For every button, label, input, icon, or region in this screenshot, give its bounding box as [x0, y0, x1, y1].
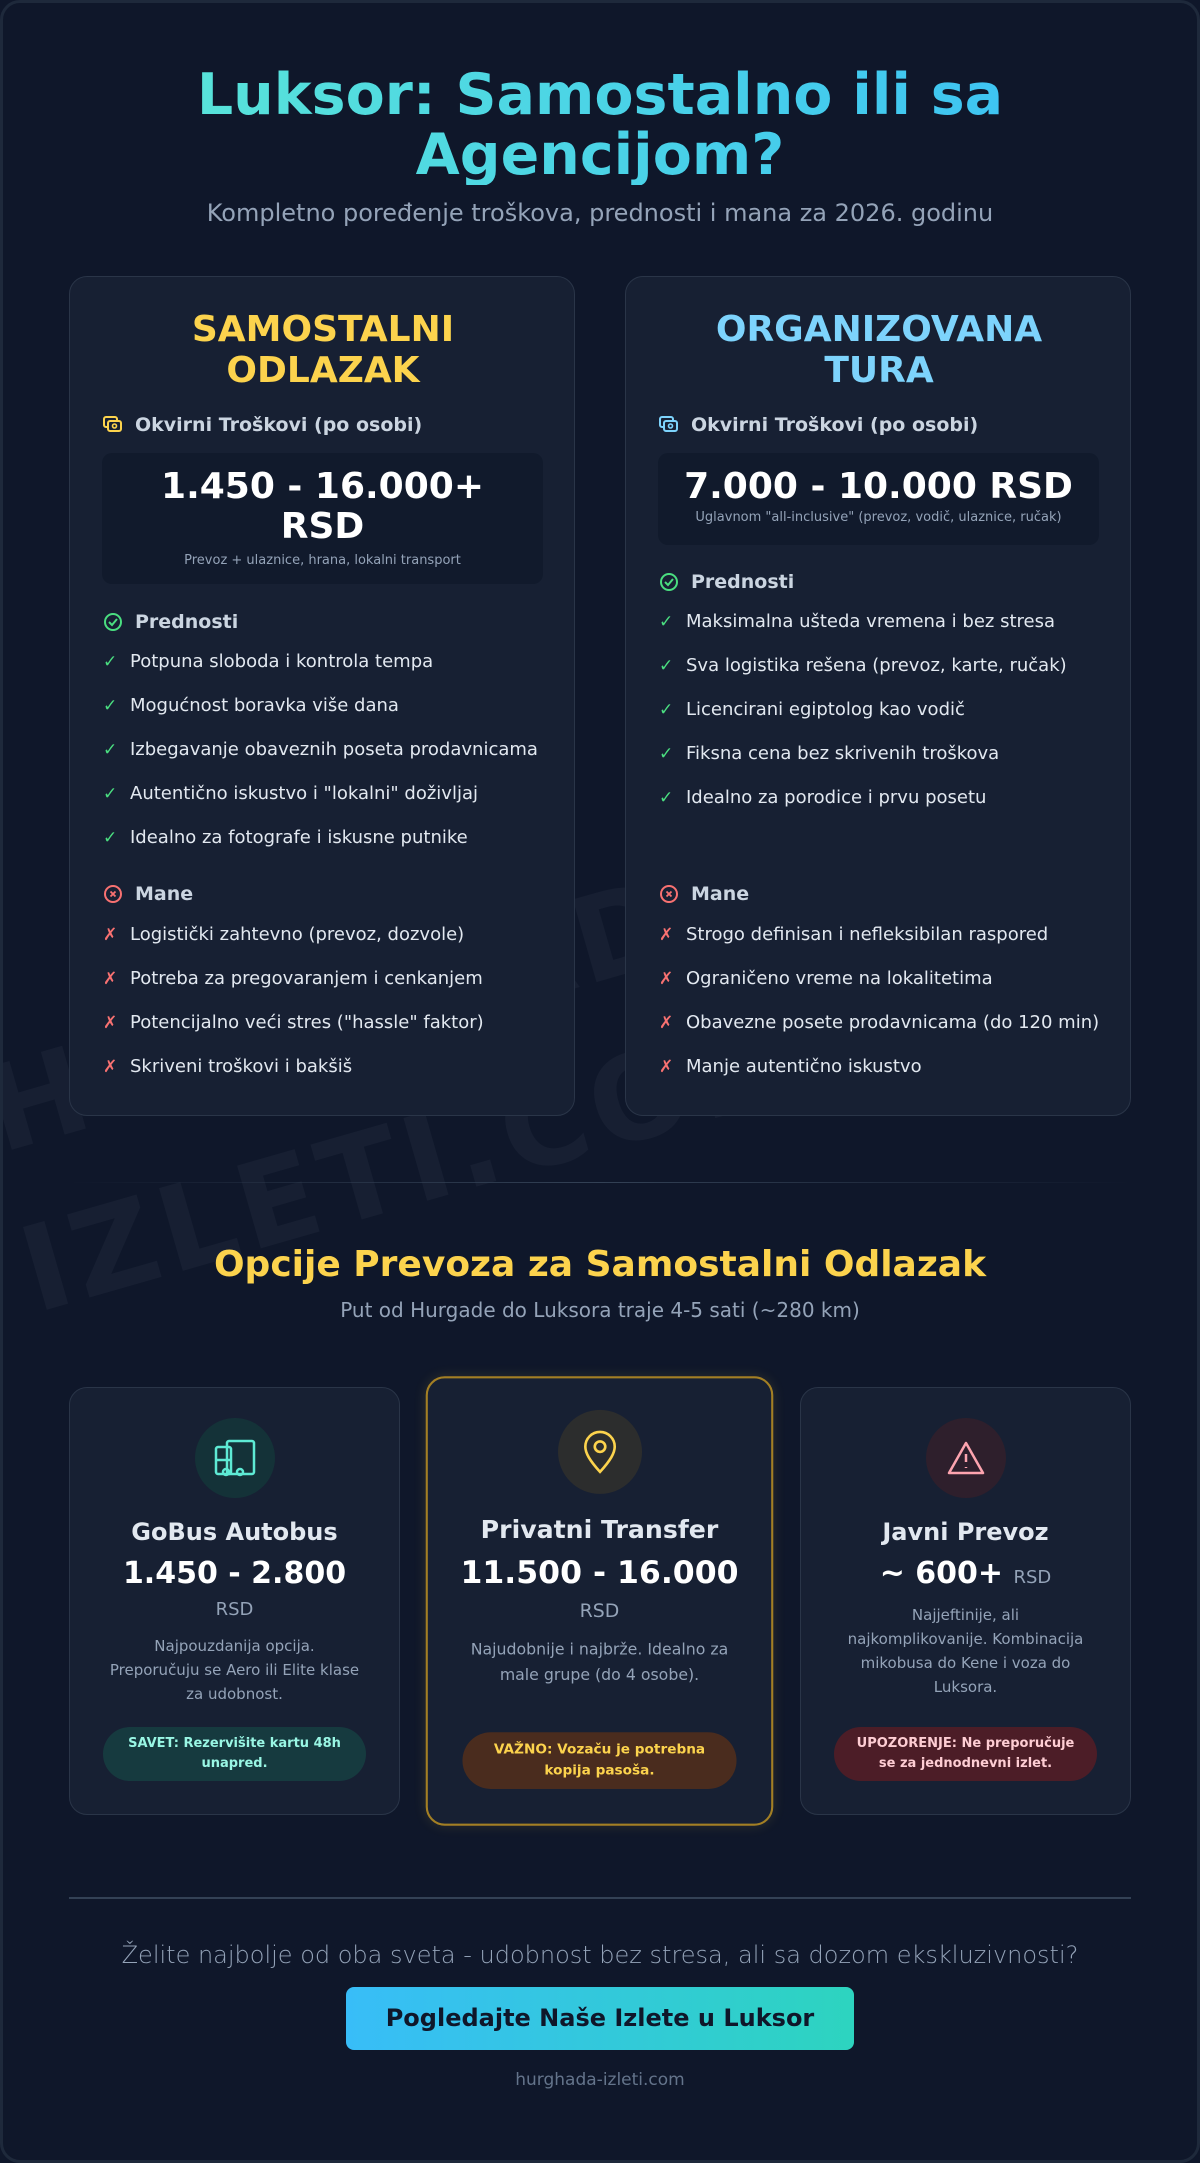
- price: 1.450 - 2.800: [123, 1556, 346, 1591]
- pros list: Izbegavanje obaveznih poseta prodavnicama: [130, 739, 538, 760]
- website url: hurghada-izleti.com: [515, 2070, 685, 2090]
- card heading: SAMOSTALNI: [192, 309, 454, 350]
- warning pill: se za jednodnevni izlet.: [879, 1756, 1052, 1771]
- cons heading: Mane: [691, 883, 749, 905]
- icon: bus: [194, 1418, 274, 1498]
- panel: organizovana tura: [625, 276, 1131, 1116]
- pros list: Maksimalna ušteda vremena i bez stresa: [686, 611, 1055, 632]
- cons list: Potencijalno veći stres ("hassle" faktor): [130, 1012, 484, 1033]
- cons list: ✗: [659, 1013, 673, 1033]
- section title: Opcije Prevoza za Samostalni Odlazak: [214, 1244, 986, 1285]
- description: mikobusa do Kene i voza do: [861, 1654, 1070, 1672]
- cons list: ✗: [659, 925, 673, 945]
- cons list: [103, 924, 484, 1077]
- subtitle: Kompletno poređenje troškova, prednosti i mana za 2026. godinu: [207, 199, 993, 227]
- panel: gobus: RSD: [216, 1599, 253, 1620]
- cons list: Skriveni troškovi i bakšiš: [130, 1056, 352, 1077]
- description: Luksora.: [934, 1678, 997, 1696]
- cons list: ✗: [103, 969, 117, 989]
- card heading: [716, 309, 1042, 391]
- title: GoBus Autobus: [131, 1518, 338, 1546]
- pros list: ✓: [659, 700, 673, 720]
- cons list: Ograničeno vreme na lokalitetima: [686, 968, 993, 989]
- description: [848, 1606, 1083, 1696]
- pros list: Fiksna cena bez skrivenih troškova: [686, 743, 999, 764]
- panel: privatni transfer: [426, 1376, 773, 1826]
- description: Najpouzdanija opcija.: [154, 1637, 315, 1655]
- pros list: Idealno za porodice i prvu posetu: [686, 787, 986, 808]
- tip pill: [103, 1727, 366, 1781]
- pros list: Autentično iskustvo i "lokalni" doživljaj: [130, 783, 478, 804]
- cons list: ✗: [103, 1013, 117, 1033]
- panel: samostalni odlazak: [69, 276, 575, 1116]
- pros list: ✓: [103, 784, 117, 804]
- cons list: ✗: [659, 969, 673, 989]
- price box: RSD: [281, 506, 364, 547]
- tip pill: unapred.: [201, 1756, 268, 1771]
- price box: 7.000 - 10.000 RSD: [684, 466, 1073, 507]
- pros list: ✓: [103, 696, 117, 716]
- costs heading: Okvirni Troškovi (po osobi): [135, 414, 422, 436]
- description: najkomplikovanije. Kombinacija: [848, 1630, 1083, 1648]
- description: za udobnost.: [186, 1685, 283, 1703]
- pros list: Mogućnost boravka više dana: [130, 695, 399, 716]
- warning pill: kopija pasoša.: [544, 1763, 655, 1778]
- icon: warning: [926, 1418, 1006, 1498]
- pros list: Idealno za fotografe i iskusne putnike: [130, 827, 468, 848]
- title: Agencijom?: [416, 122, 784, 188]
- cons list: Manje autentično iskustvo: [686, 1056, 922, 1077]
- pros list: [659, 611, 1067, 808]
- panel: privatni transfer: RSD: [580, 1600, 619, 1622]
- pros list: Potpuna sloboda i kontrola tempa: [130, 651, 433, 672]
- cons heading: Mane: [135, 883, 193, 905]
- cons list: [659, 924, 1099, 1077]
- description: [471, 1640, 728, 1684]
- cons list: ✗: [103, 1057, 117, 1077]
- footer question: Želite najbolje od oba sveta - udobnost bez stresa, ali sa dozom ekskluzivnosti?: [122, 1941, 1078, 1969]
- CTA button: Pogledajte Naše Izlete u Luksor: [386, 2004, 814, 2032]
- cons list: Potreba za pregovaranjem i cenkanjem: [130, 968, 483, 989]
- pros list: ✓: [659, 612, 673, 632]
- cons list: ✗: [659, 1057, 673, 1077]
- card heading: ODLAZAK: [226, 350, 420, 391]
- pros heading: Prednosti: [691, 571, 794, 593]
- warning pill: UPOZORENJE: Ne preporučuje: [857, 1736, 1074, 1751]
- title: Luksor: Samostalno ili sa: [197, 62, 1003, 128]
- cons list: Logistički zahtevno (prevoz, dozvole): [130, 924, 464, 945]
- cons list: Strogo definisan i nefleksibilan raspored: [686, 924, 1048, 945]
- CTA button: [346, 1987, 854, 2050]
- icon: location pin: [558, 1410, 642, 1494]
- panel: gobus: [69, 1387, 400, 1815]
- card heading: ORGANIZOVANA: [716, 309, 1042, 350]
- title: Javni Prevoz: [882, 1518, 1049, 1546]
- tip pill: SAVET: Rezervišite kartu 48h: [128, 1736, 341, 1751]
- pros list: Sva logistika rešena (prevoz, karte, ručak): [686, 655, 1067, 676]
- description: Najudobnije i najbrže. Idealno za: [471, 1640, 728, 1659]
- warning pill: [834, 1727, 1097, 1781]
- cons heading: [104, 883, 193, 905]
- warning pill: [462, 1732, 737, 1789]
- panel: javni prevoz: [800, 1387, 1131, 1815]
- pros list: ✓: [659, 788, 673, 808]
- cons list: ✗: [103, 925, 117, 945]
- price: 11.500 - 16.000: [460, 1555, 739, 1592]
- pros list: Licencirani egiptolog kao vodič: [686, 699, 965, 720]
- section subtitle: Put od Hurgade do Luksora traje 4-5 sati (~280 km): [340, 1298, 860, 1322]
- description: [110, 1637, 359, 1703]
- price box: Uglavnom "all-inclusive" (prevoz, vodič, ulaznice, ručak): [695, 510, 1062, 525]
- pros list: ✓: [103, 652, 117, 672]
- price box: [102, 453, 543, 584]
- price box: [658, 453, 1099, 545]
- pros list: ✓: [103, 740, 117, 760]
- description: Preporučuju se Aero ili Elite klase: [110, 1661, 359, 1679]
- warning pill: VAŽNO: Vozaču je potrebna: [494, 1742, 705, 1757]
- pros list: ✓: [103, 828, 117, 848]
- card heading: [192, 309, 454, 391]
- price box: 1.450 - 16.000+: [161, 466, 484, 507]
- costs heading: Okvirni Troškovi (po osobi): [691, 414, 978, 436]
- price box: Prevoz + ulaznice, hrana, lokalni transport: [184, 553, 461, 568]
- pros list: ✓: [659, 656, 673, 676]
- card heading: TURA: [824, 350, 934, 391]
- description: male grupe (do 4 osobe).: [500, 1665, 699, 1684]
- cons list: Obavezne posete prodavnicama (do 120 min): [686, 1012, 1099, 1033]
- pros list: ✓: [659, 744, 673, 764]
- title: Privatni Transfer: [481, 1515, 718, 1544]
- pros heading: Prednosti: [135, 611, 238, 633]
- description: Najjeftinije, ali: [912, 1606, 1019, 1624]
- pros list: [103, 651, 538, 848]
- watermark: IZLETI.COM: [6, 981, 831, 1340]
- cons heading: [660, 883, 749, 905]
- title: [0, 65, 1200, 185]
- price: ~ 600+ RSD: [880, 1556, 1051, 1591]
